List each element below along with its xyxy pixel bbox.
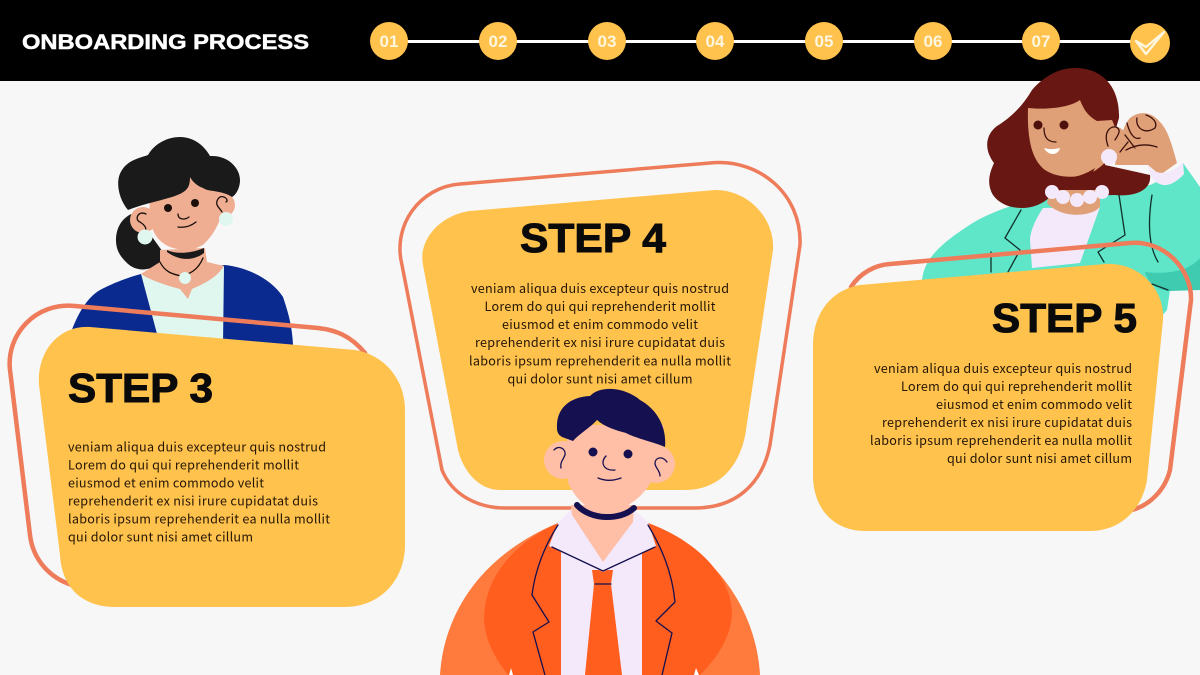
body text: step 5: qui dolor sunt nisi amet cillum [947,448,1132,467]
body text: step 4: reprehenderit ex nisi irure cupidatat duis [475,332,725,351]
step 05 marker: 05 [815,32,833,51]
panel: step 4 [400,163,800,508]
illustration: woman with brown hair [922,68,1200,330]
body text: step 3: eiusmod et enim commodo velit [68,472,264,492]
heading: step 4: STEP 4 [520,215,666,261]
body text: step 3: qui dolor sunt nisi amet cillum [68,526,253,546]
step 03 marker: 03 [598,32,616,51]
header bar [0,0,1200,81]
progress timeline [370,22,1170,63]
heading: step 3: STEP 3 [68,365,213,411]
step 06 marker [914,22,952,60]
body text: step 5: veniam aliqua duis excepteur quis nostrud [874,358,1132,377]
body text: step 5: eiusmod et enim commodo velit [936,394,1132,413]
body text: step 5: laboris ipsum reprehenderit ea nulla mollit [870,430,1132,449]
body text: step 5: Lorem do qui qui reprehenderit mollit [901,376,1132,395]
card background: step 5 [813,264,1163,531]
step 06 marker: 06 [924,32,942,51]
step 07 marker [1022,22,1060,60]
body text: step 3: Lorem do qui qui reprehenderit mollit [68,454,299,474]
card background: step 4 [422,190,773,490]
title: ONBOARDING PROCESS [22,31,309,54]
body text: step 3: veniam aliqua duis excepteur quis nostrud [68,436,326,456]
body text: step 4: eiusmod et enim commodo velit [502,314,698,333]
body text: step 4: veniam aliqua duis excepteur quis nostrud [471,278,729,297]
body text: step 4: Lorem do qui qui reprehenderit mollit [484,296,716,315]
step 03 marker [588,22,626,60]
step 04 marker: 04 [706,32,725,51]
card outline: step 4 [400,163,800,508]
body text: step 4: qui dolor sunt nisi amet cillum [508,368,692,388]
step 07 marker: 07 [1032,32,1050,51]
body text: step 3 [68,436,330,546]
card outline: step 3 [10,306,365,585]
step 02 marker: 02 [489,32,507,51]
body text: step 4: laboris ipsum reprehenderit ea nulla mollit [469,350,731,370]
body text: step 4 [469,278,731,388]
body text: step 3: reprehenderit ex nisi irure cupidatat duis [68,490,318,510]
step 01 marker: 01 [380,32,398,51]
illustration: man in orange suit [440,389,760,675]
panel: step 3 [10,306,405,607]
card background: step 3 [39,327,405,607]
step 05 marker [805,22,843,60]
card outline: step 5 [851,243,1191,510]
heading: step 5: STEP 5 [992,295,1137,341]
icon: completed check [1130,23,1170,63]
panel: step 5 [813,243,1191,531]
body text: step 5 [870,358,1132,467]
illustration: woman with dark bun [70,137,293,345]
step 04 marker [696,22,734,60]
step 02 marker [479,22,517,60]
body text: step 5: reprehenderit ex nisi irure cupidatat duis [882,412,1132,431]
step 01 marker [370,22,408,60]
body text: step 3: laboris ipsum reprehenderit ea nulla mollit [68,508,330,528]
